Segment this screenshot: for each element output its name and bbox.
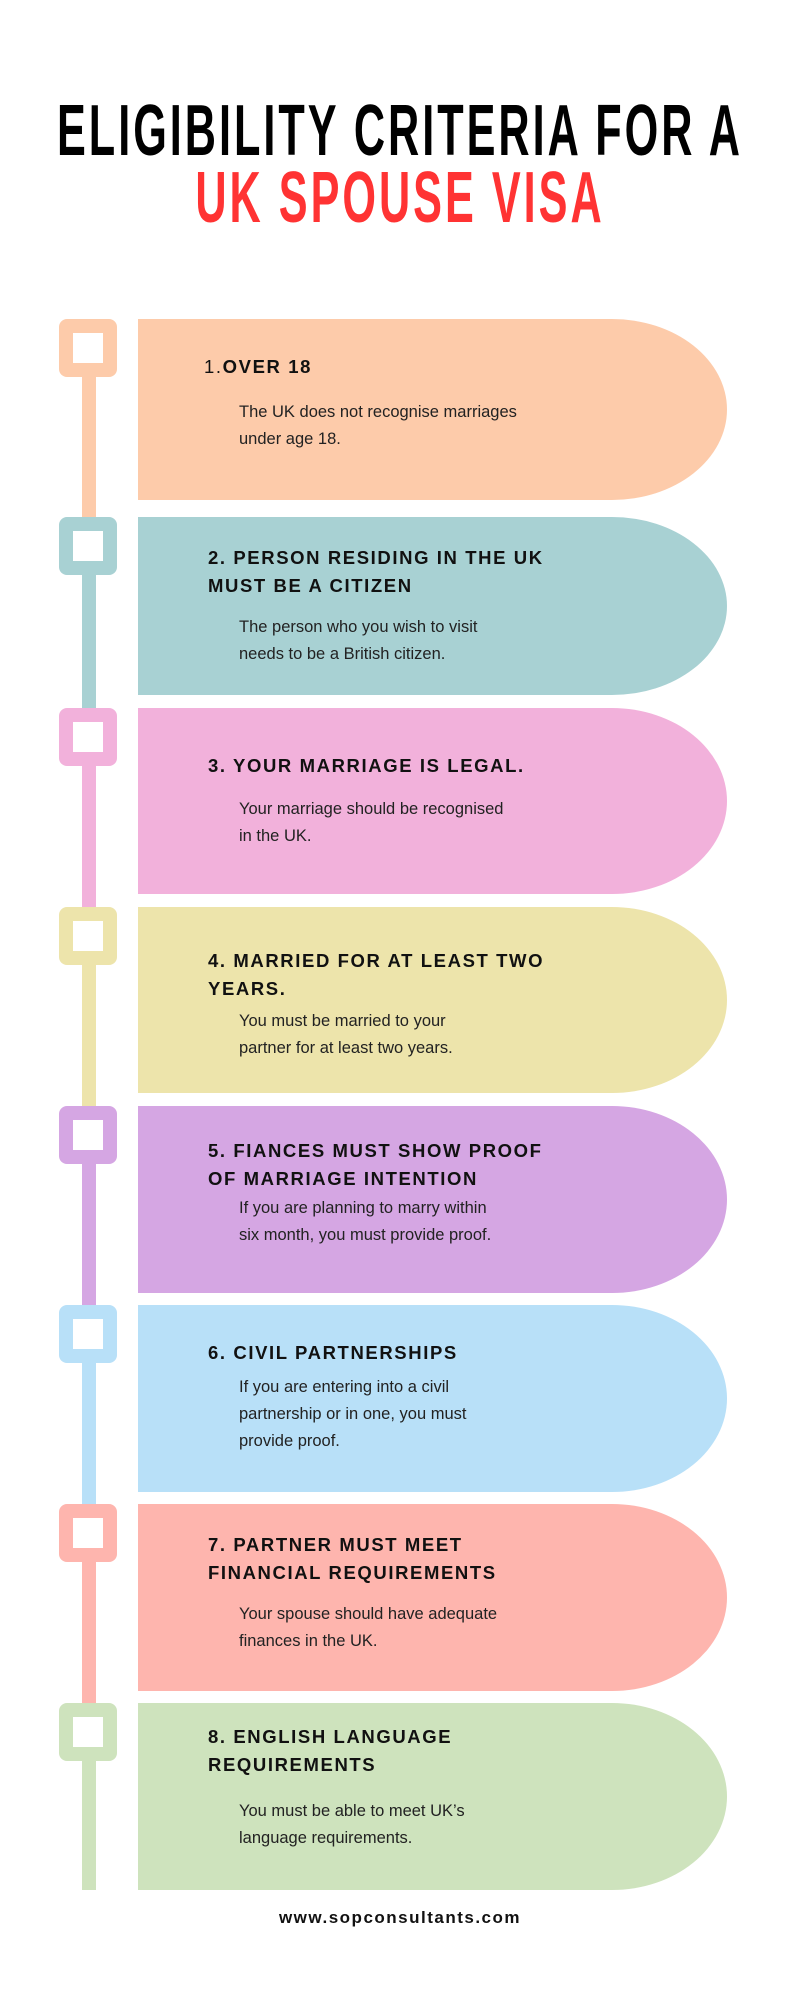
body 8 (239, 1802, 465, 1847)
heading 2 (208, 547, 544, 596)
heading 8: 8. ENGLISH LANGUAGE (208, 1726, 452, 1747)
body 4 (239, 1012, 453, 1057)
body 3: in the UK. (239, 827, 311, 845)
body 5: If you are planning to marry within (239, 1199, 487, 1217)
heading 8: REQUIREMENTS (208, 1754, 376, 1775)
body 1 (239, 403, 517, 448)
timeline line 6 (82, 1360, 96, 1510)
heading 7: 7. PARTNER MUST MEET (208, 1534, 463, 1555)
card 1 (138, 319, 727, 500)
timeline line 8 (82, 1760, 96, 1890)
body 4: partner for at least two years. (239, 1039, 453, 1057)
title line 2: UK SPOUSE VISA (195, 158, 605, 238)
body 2: needs to be a British citizen. (239, 645, 445, 663)
body 8: You must be able to meet UK’s (239, 1802, 465, 1820)
body 6 (239, 1378, 466, 1450)
icon: square 2 (59, 517, 117, 575)
body 8: language requirements. (239, 1829, 412, 1847)
body 5: six month, you must provide proof. (239, 1226, 491, 1244)
heading 2: MUST BE A CITIZEN (208, 575, 413, 596)
body 1: The UK does not recognise marriages (239, 403, 517, 421)
card 8 (138, 1703, 727, 1890)
icon: square 5 (59, 1106, 117, 1164)
body 5 (239, 1199, 491, 1244)
heading 8 (208, 1726, 452, 1775)
body 7: finances in the UK. (239, 1632, 378, 1650)
heading 5: OF MARRIAGE INTENTION (208, 1168, 478, 1189)
body 2: The person who you wish to visit (239, 618, 477, 636)
card 6 (138, 1305, 727, 1492)
heading 2: 2. PERSON RESIDING IN THE UK (208, 547, 544, 568)
heading 7 (208, 1534, 497, 1583)
heading 6: 6. CIVIL PARTNERSHIPS (208, 1342, 458, 1363)
body 2 (239, 618, 478, 663)
body 6: provide proof. (239, 1432, 340, 1450)
body 3: Your marriage should be recognised (239, 800, 503, 818)
heading 5: 5. FIANCES MUST SHOW PROOF (208, 1140, 543, 1161)
timeline line 5 (82, 1160, 96, 1310)
title line 1: ELIGIBILITY CRITERIA FOR A (57, 91, 743, 171)
icon: square 1 (59, 319, 117, 377)
icon: square 3 (59, 708, 117, 766)
timeline line 1 (82, 370, 96, 520)
body 6: partnership or in one, you must (239, 1405, 466, 1423)
heading 4 (208, 950, 544, 999)
heading 1: 1.OVER 18 (204, 356, 312, 377)
body 7 (239, 1605, 497, 1650)
footer url: www.sopconsultants.com (279, 1908, 521, 1927)
timeline line 4 (82, 960, 96, 1110)
icon: square 6 (59, 1305, 117, 1363)
icon: square 4 (59, 907, 117, 965)
heading 4: YEARS. (208, 978, 286, 999)
body 6: If you are entering into a civil (239, 1378, 449, 1396)
card 4 (138, 907, 727, 1093)
body 4: You must be married to your (239, 1012, 446, 1030)
body 1: under age 18. (239, 430, 341, 448)
card 5 (138, 1106, 727, 1293)
icon: square 8 (59, 1703, 117, 1761)
card 7 (138, 1504, 727, 1691)
body 3 (239, 800, 503, 845)
timeline line 7 (82, 1560, 96, 1710)
heading 5 (208, 1140, 543, 1189)
heading 4: 4. MARRIED FOR AT LEAST TWO (208, 950, 544, 971)
timeline line 2 (82, 570, 96, 715)
timeline line 3 (82, 760, 96, 910)
card 3 (138, 708, 727, 894)
body 7: Your spouse should have adequate (239, 1605, 497, 1623)
heading 3: 3. YOUR MARRIAGE IS LEGAL. (208, 755, 525, 776)
icon: square 7 (59, 1504, 117, 1562)
card 2 (138, 517, 727, 695)
heading 7: FINANCIAL REQUIREMENTS (208, 1562, 497, 1583)
